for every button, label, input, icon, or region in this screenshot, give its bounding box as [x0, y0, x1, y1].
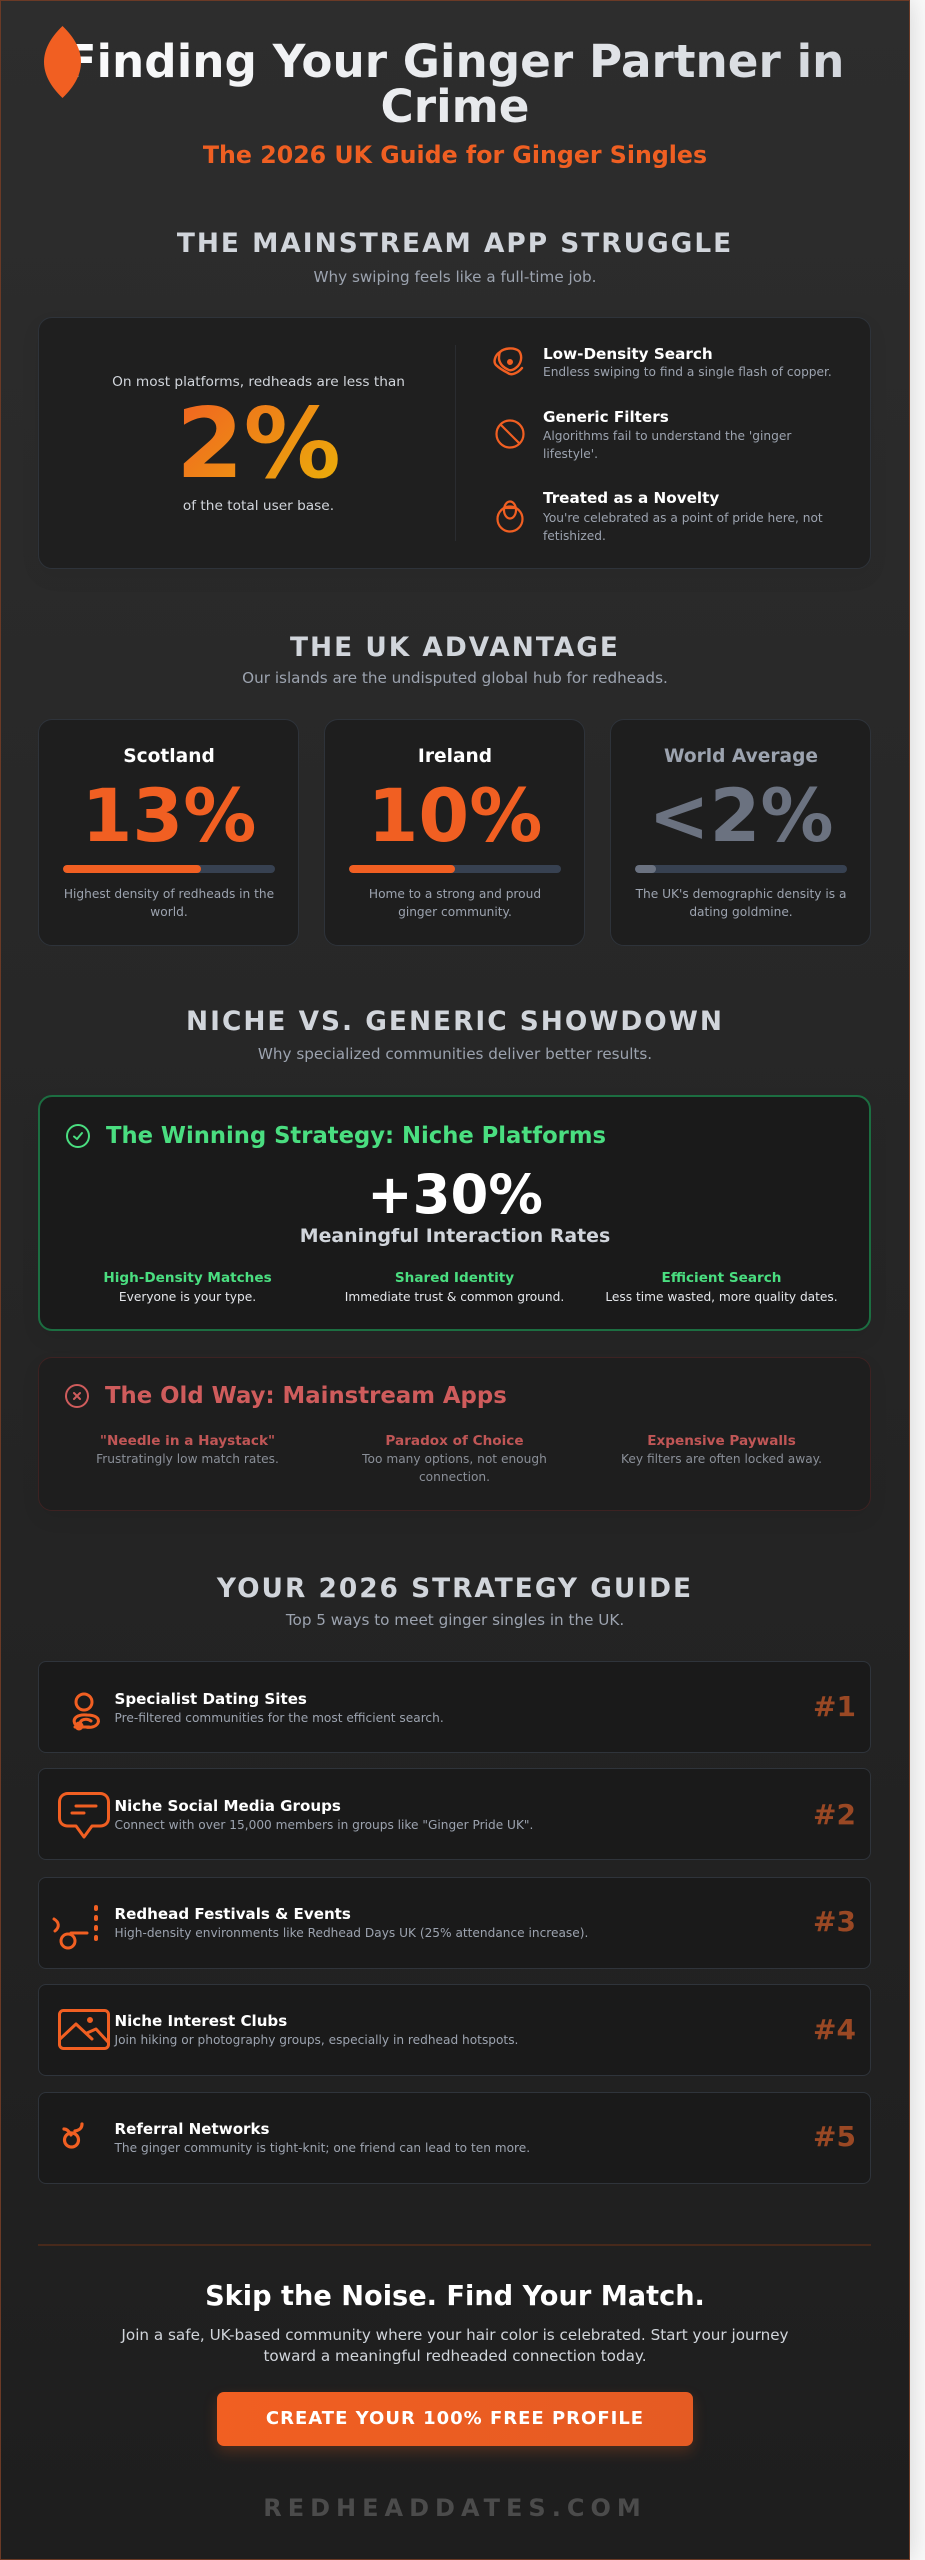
text: description: The ginger community is tight-knit; one friend can lead to ten more. [114, 2141, 530, 2155]
stat caption: of the total user base. [183, 498, 334, 514]
section heading: uk advantage: THE UK ADVANTAGE [290, 632, 620, 662]
text: niche social media groups: Niche Social Media Groups [114, 1797, 341, 1815]
col text [362, 1452, 547, 1484]
text: generic filters: Generic Filters [543, 408, 669, 426]
CTA text: toward a meaningful redheaded connection today. [263, 2347, 647, 2365]
col text: Too many options, not enough [362, 1452, 547, 1466]
bar: Scotland 65% [63, 865, 275, 873]
section subheading: Why specialized communities deliver better results. [258, 1044, 652, 1062]
text: description: Pre-filtered communities for the most efficient search. [114, 1710, 444, 1724]
CTA button: CREATE YOUR 100% FREE PROFILE [266, 2408, 644, 2429]
heading: winning strategy: The Winning Strategy: Niche Platforms [106, 1123, 606, 1149]
text: generic filters description: Algorithms fail to understand the 'ginger [543, 429, 791, 443]
card description: Home to a strong and proud [369, 887, 541, 901]
col text: Immediate trust & common ground. [345, 1290, 564, 1304]
panel: strategy 5 [38, 2092, 871, 2184]
bar: World average 10% [635, 865, 847, 873]
panel: winning strategy [38, 1095, 871, 1331]
stat caption: Meaningful Interaction Rates [300, 1225, 610, 1247]
section heading: mainstream app struggle: THE MAINSTREAM APP STRUGGLE [177, 228, 733, 259]
card description: The UK's demographic density is a [636, 887, 846, 901]
section subheading: Why swiping feels like a full-time job. [314, 268, 596, 286]
section heading: strategy guide: YOUR 2026 STRATEGY GUIDE [217, 1573, 693, 1604]
icon: low density search [493, 347, 524, 376]
card description [64, 887, 274, 919]
CTA text: Join a safe, UK-based community where your hair color is celebrated. Start your journey [121, 2326, 789, 2344]
text: novelty description: fetishized. [543, 529, 606, 543]
stat: <2%: <2% [648, 774, 834, 858]
text: low-density description: Endless swiping to find a single flash of copper. [543, 365, 832, 379]
rank 2: #2 [813, 1798, 856, 1831]
icon: check circle [66, 1124, 90, 1148]
col title: Needle in a Haystack: "Needle in a Haystack" [100, 1433, 275, 1449]
panel: Scotland card [38, 719, 299, 946]
rank 4: #4 [813, 2013, 856, 2046]
title: Crime [380, 80, 530, 133]
panel: strategy 3 [38, 1877, 871, 1969]
col title: Efficient Search: Efficient Search [662, 1270, 781, 1286]
heading: old way: The Old Way: Mainstream Apps [105, 1383, 507, 1409]
big stat: 2%: 2% [176, 387, 341, 500]
card description: ginger community. [398, 905, 512, 919]
card title: Ireland: Ireland [418, 746, 492, 766]
panel: Ireland card [324, 719, 585, 946]
title [0, 39, 910, 129]
section subheading: Top 5 ways to meet ginger singles in the UK. [286, 1611, 624, 1629]
text: referral networks: Referral Networks [114, 2120, 270, 2138]
panel: old way [38, 1357, 871, 1511]
col text: connection. [419, 1470, 490, 1484]
col title: Paradox of Choice: Paradox of Choice [385, 1433, 524, 1449]
col text: Everyone is your type. [119, 1290, 256, 1304]
footer brand: REDHEADDATES.COM [263, 2494, 647, 2522]
text: generic filters description: lifestyle'. [543, 447, 598, 461]
CTA heading: Skip the Noise. Find Your Match. [205, 2281, 705, 2312]
stat: 13%: 13% [82, 774, 256, 858]
text: description: Join hiking or photography groups, especially in redhead hotspots. [114, 2033, 518, 2047]
icon: treated as a novelty [496, 500, 524, 533]
text: description: High-density environments like Redhead Days UK (25% attendance increase). [114, 1926, 588, 1940]
col title: High-Density Matches: High-Density Matches [103, 1270, 272, 1286]
title: Finding Your Ginger Partner in [66, 35, 844, 88]
panel: strategy 1 [38, 1661, 871, 1753]
icon: generic filters [495, 419, 525, 449]
rank 3: #3 [813, 1905, 856, 1938]
card description: world. [150, 905, 188, 919]
card title: World Average: World Average [664, 746, 818, 766]
col text: Less time wasted, more quality dates. [605, 1290, 838, 1304]
stat: +30%: +30% [367, 1163, 543, 1226]
icon: speech bubble [58, 1792, 110, 1839]
section heading: niche vs generic: NICHE VS. GENERIC SHOWDOWN [186, 1006, 724, 1036]
text: novelty description: You're celebrated as a point of pride here, not [543, 511, 823, 525]
subtitle: The 2026 UK Guide for Ginger Singles [203, 140, 707, 168]
CTA text [120, 2326, 789, 2365]
rank 5: #5 [813, 2120, 856, 2153]
intro text: On most platforms, redheads are less than [112, 374, 405, 390]
text: redhead festivals: Redhead Festivals & Events [114, 1904, 351, 1922]
col title: Shared Identity: Shared Identity [395, 1270, 514, 1286]
section subheading: Our islands are the undisputed global hub for redheads. [242, 669, 668, 687]
icon: specialist dating [72, 1692, 100, 1730]
card description: dating goldmine. [689, 905, 793, 919]
icon: picture [58, 2009, 110, 2050]
CTA button [217, 2392, 693, 2446]
icon: x circle [65, 1384, 89, 1408]
text: generic filters description [543, 429, 792, 461]
card title: Scotland: Scotland [123, 746, 215, 766]
panel: World Average card [610, 719, 871, 946]
card description [636, 887, 846, 919]
text: low-density search: Low-Density Search [543, 344, 713, 362]
col text: Key filters are often locked away. [621, 1452, 822, 1466]
icon: copper leaf logo [44, 26, 81, 98]
panel: strategy 4 [38, 1984, 871, 2076]
icon: festivals [52, 1905, 98, 1950]
text: treated as a novelty: Treated as a Novelty [543, 489, 719, 507]
stat: 10%: 10% [368, 774, 542, 858]
bar: Ireland 50% [349, 865, 561, 873]
text: specialist dating sites: Specialist Dating Sites [114, 1690, 307, 1708]
icon: referral [62, 2122, 84, 2149]
card description [369, 887, 541, 919]
text: description: Connect with over 15,000 members in groups like "Ginger Pride UK". [114, 1818, 533, 1832]
rank 1: #1 [813, 1690, 856, 1723]
panel: strategy 2 [38, 1768, 871, 1860]
card description: Highest density of redheads in the [64, 887, 274, 901]
col title: Expensive Paywalls: Expensive Paywalls [647, 1433, 796, 1449]
text: novelty description [543, 511, 823, 543]
text: niche interest clubs: Niche Interest Clubs [114, 2012, 287, 2030]
col text: Frustratingly low match rates. [96, 1452, 279, 1466]
panel: mainstream struggle [38, 317, 871, 569]
